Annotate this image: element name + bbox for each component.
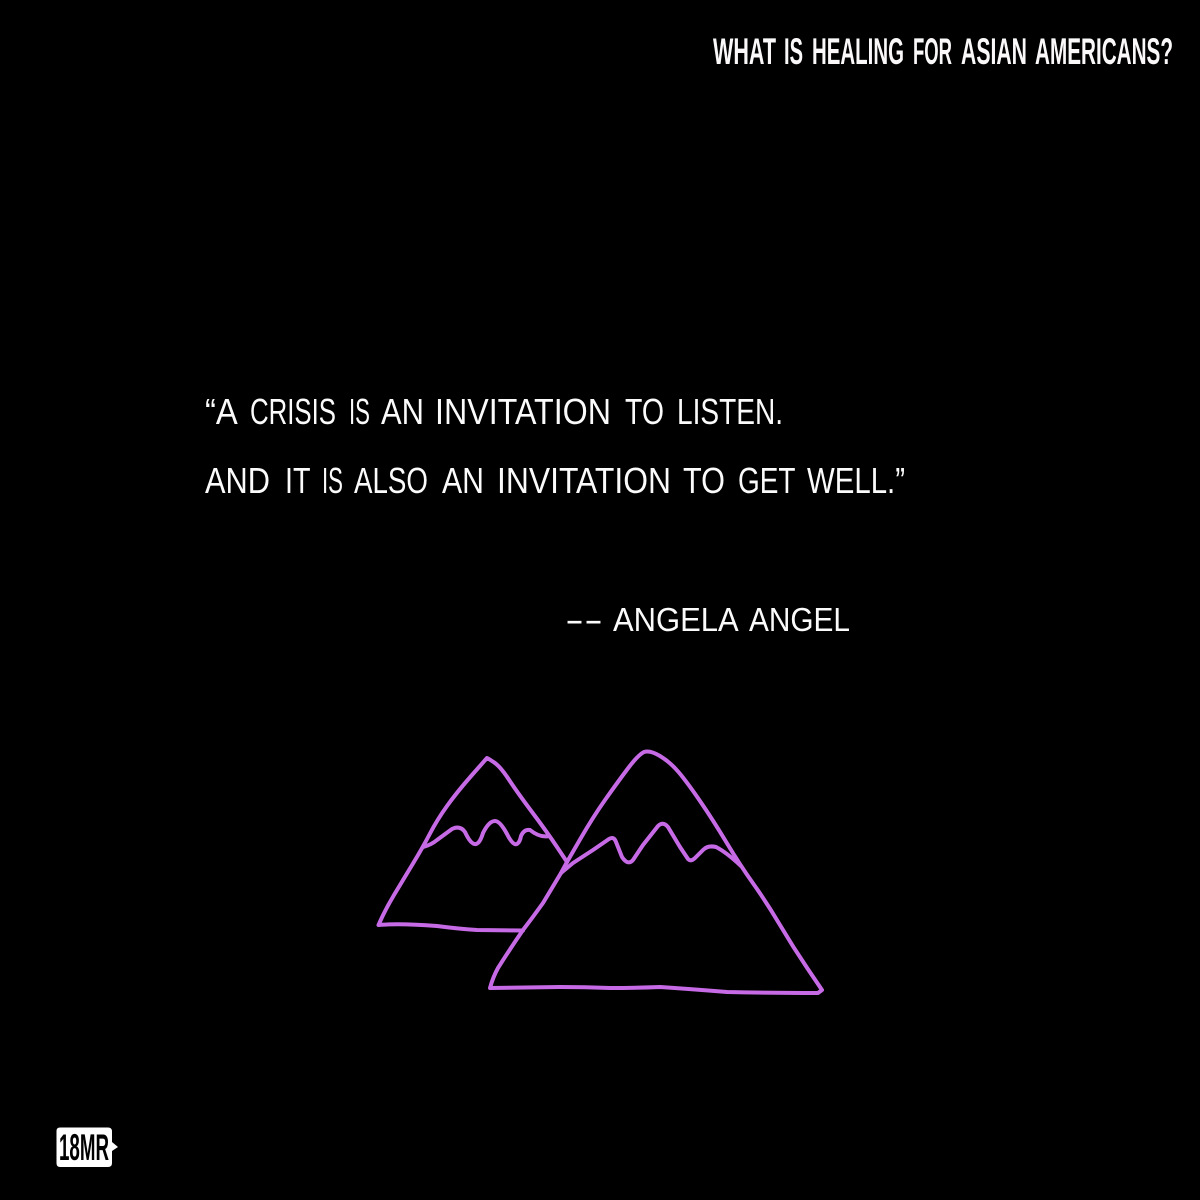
quote line 1: INVITATION bbox=[435, 391, 611, 432]
quote text bbox=[205, 391, 905, 501]
quote line 2: INVITATION bbox=[497, 460, 671, 501]
quote line 2: ALSO bbox=[354, 460, 428, 501]
quote line 2: GET bbox=[738, 460, 796, 501]
right mountain snow line bbox=[561, 824, 741, 873]
left mountain outline bbox=[378, 758, 567, 930]
quote line 1: TO bbox=[625, 391, 664, 432]
attribution: -- bbox=[565, 601, 603, 638]
logo badge bbox=[56, 1128, 118, 1167]
quote line 2: IT bbox=[285, 460, 311, 501]
quote line 1: LISTEN. bbox=[677, 391, 783, 432]
title: IS bbox=[784, 31, 803, 72]
left mountain snow line bbox=[423, 821, 549, 847]
quote line 1: AN bbox=[381, 391, 424, 432]
logo text: 18MR bbox=[59, 1127, 109, 1168]
title: WHAT bbox=[713, 31, 776, 72]
quote line 2: AN bbox=[442, 460, 484, 501]
logo: 18MR bbox=[56, 1127, 118, 1168]
quote line 1: IS bbox=[349, 391, 370, 432]
illustration: two mountains bbox=[378, 752, 822, 993]
quote line 2: TO bbox=[683, 460, 725, 501]
title: FOR bbox=[913, 31, 952, 72]
right mountain outline bbox=[490, 752, 822, 993]
quote line 2: IS bbox=[322, 460, 343, 501]
attribution: ANGEL bbox=[749, 601, 850, 638]
quote line 2: WELL.” bbox=[807, 460, 905, 501]
quote line 1: “A bbox=[205, 391, 238, 432]
quote line 1: CRISIS bbox=[250, 391, 336, 432]
title: ASIAN bbox=[961, 31, 1027, 72]
attribution: ANGELA bbox=[613, 601, 739, 638]
title: HEALING bbox=[812, 31, 904, 72]
quote line 2: AND bbox=[205, 460, 270, 501]
